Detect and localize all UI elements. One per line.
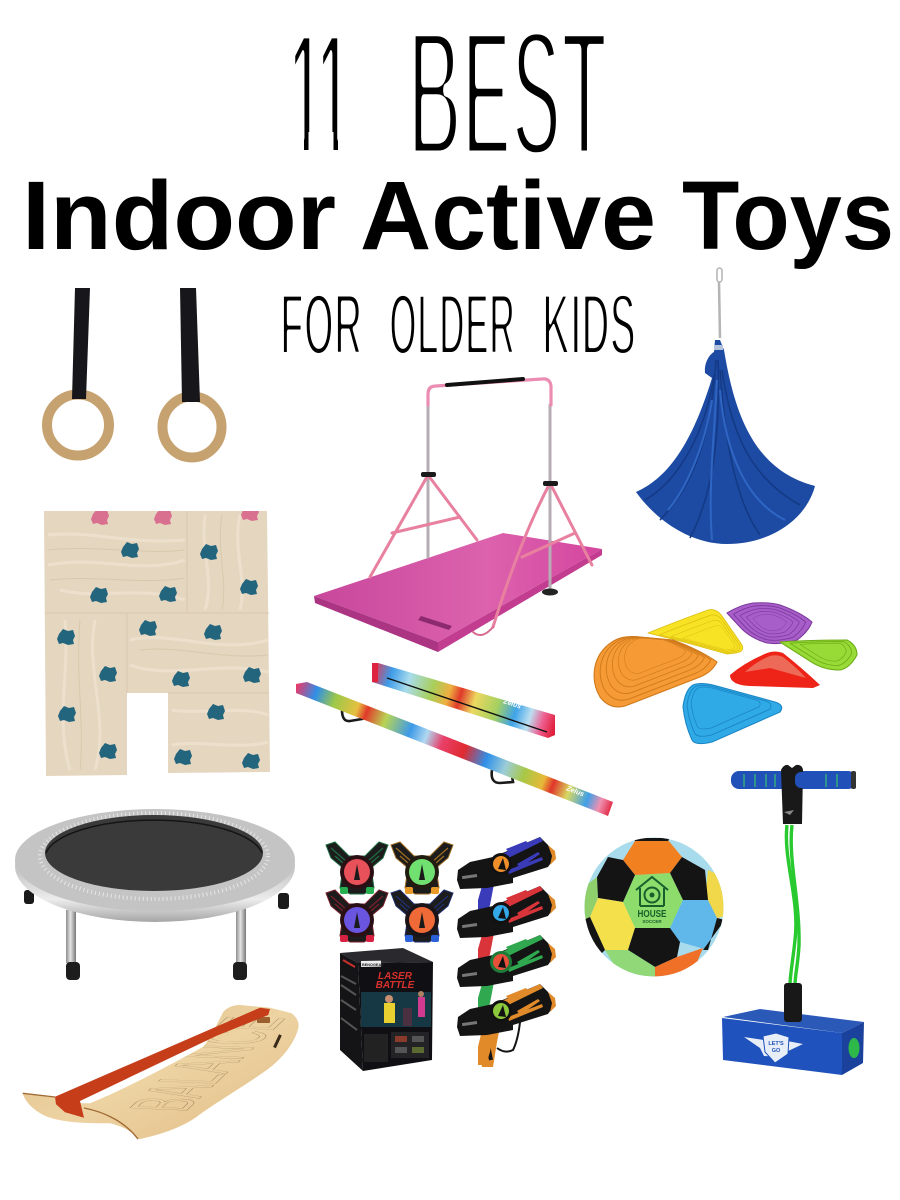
orange stone <box>594 637 717 707</box>
yellow stone <box>648 610 743 654</box>
toy: balance beams <box>296 663 613 816</box>
vest 2 <box>391 842 453 894</box>
toy: balance board <box>23 1005 304 1139</box>
toy: gymnastic rings <box>47 288 222 458</box>
long beam <box>296 682 613 816</box>
heading: Indoor Active Toys: Toys <box>682 161 894 270</box>
toy: mini trampoline <box>15 809 295 980</box>
ball logo: SOCCER <box>642 919 662 924</box>
ball logo: HOUSE <box>638 909 667 920</box>
padded rim <box>15 810 295 922</box>
vest 3 <box>326 890 388 942</box>
product box: LASER <box>378 971 413 982</box>
center panel <box>623 873 683 928</box>
board lettering: BALANCE <box>112 1015 304 1113</box>
folded beam <box>372 663 555 738</box>
wing badge <box>744 1033 803 1063</box>
handle <box>731 765 856 824</box>
toy: house soccer ball <box>584 838 724 976</box>
purple stone <box>727 603 812 644</box>
folding mat <box>314 533 602 652</box>
subtitle: for older kids: OLDER <box>389 274 515 374</box>
legs <box>24 890 289 980</box>
red stone <box>730 652 820 688</box>
long beam: Zelus <box>564 785 585 798</box>
blue gun <box>457 837 556 918</box>
fabric <box>636 340 815 544</box>
toy: foam pogo jumper <box>722 765 864 1075</box>
toy: climbing wall <box>44 505 270 776</box>
wing badge: LET'S <box>768 1041 784 1047</box>
green gun <box>457 935 556 1016</box>
pink holds <box>91 511 259 525</box>
spring tubes <box>786 825 799 985</box>
heading: Indoor Active Toys: Active <box>360 161 656 270</box>
blue stone <box>683 684 782 744</box>
product box: BATTLE <box>376 980 415 991</box>
ball logo <box>636 877 668 924</box>
heading: Indoor Active Toys: Indoor <box>22 161 336 270</box>
heading: Indoor Active Toys <box>22 161 894 270</box>
title: 11 Best: 11 <box>290 0 349 193</box>
subtitle: for older kids <box>280 274 636 374</box>
folded beam: Zelus <box>501 698 522 711</box>
red gun <box>457 886 556 967</box>
red strap <box>55 1008 270 1118</box>
toy: pull-up bar with pink mat <box>314 379 602 652</box>
infographic canvas: KIDS <box>542 274 636 374</box>
vest 1 <box>326 842 388 894</box>
blue holds <box>57 542 261 769</box>
jump mat <box>45 815 263 891</box>
orange gun <box>457 984 556 1067</box>
title: 11 Best <box>286 0 607 197</box>
toy: stepping stones <box>594 603 857 744</box>
foam base <box>722 983 864 1075</box>
bar frame <box>370 379 592 635</box>
product box <box>340 948 433 1071</box>
hook <box>717 268 722 338</box>
vest 4 <box>391 890 453 942</box>
product box: BENOGEAR <box>362 963 384 967</box>
vests <box>326 842 453 942</box>
subtitle: for older kids: FOR <box>280 274 362 374</box>
board brand mark <box>273 1034 282 1048</box>
green stone <box>780 640 857 670</box>
toy: laser tag set <box>326 837 556 1071</box>
toy: aerial yoga hammock <box>636 268 815 544</box>
wing badge: GO <box>772 1048 781 1054</box>
